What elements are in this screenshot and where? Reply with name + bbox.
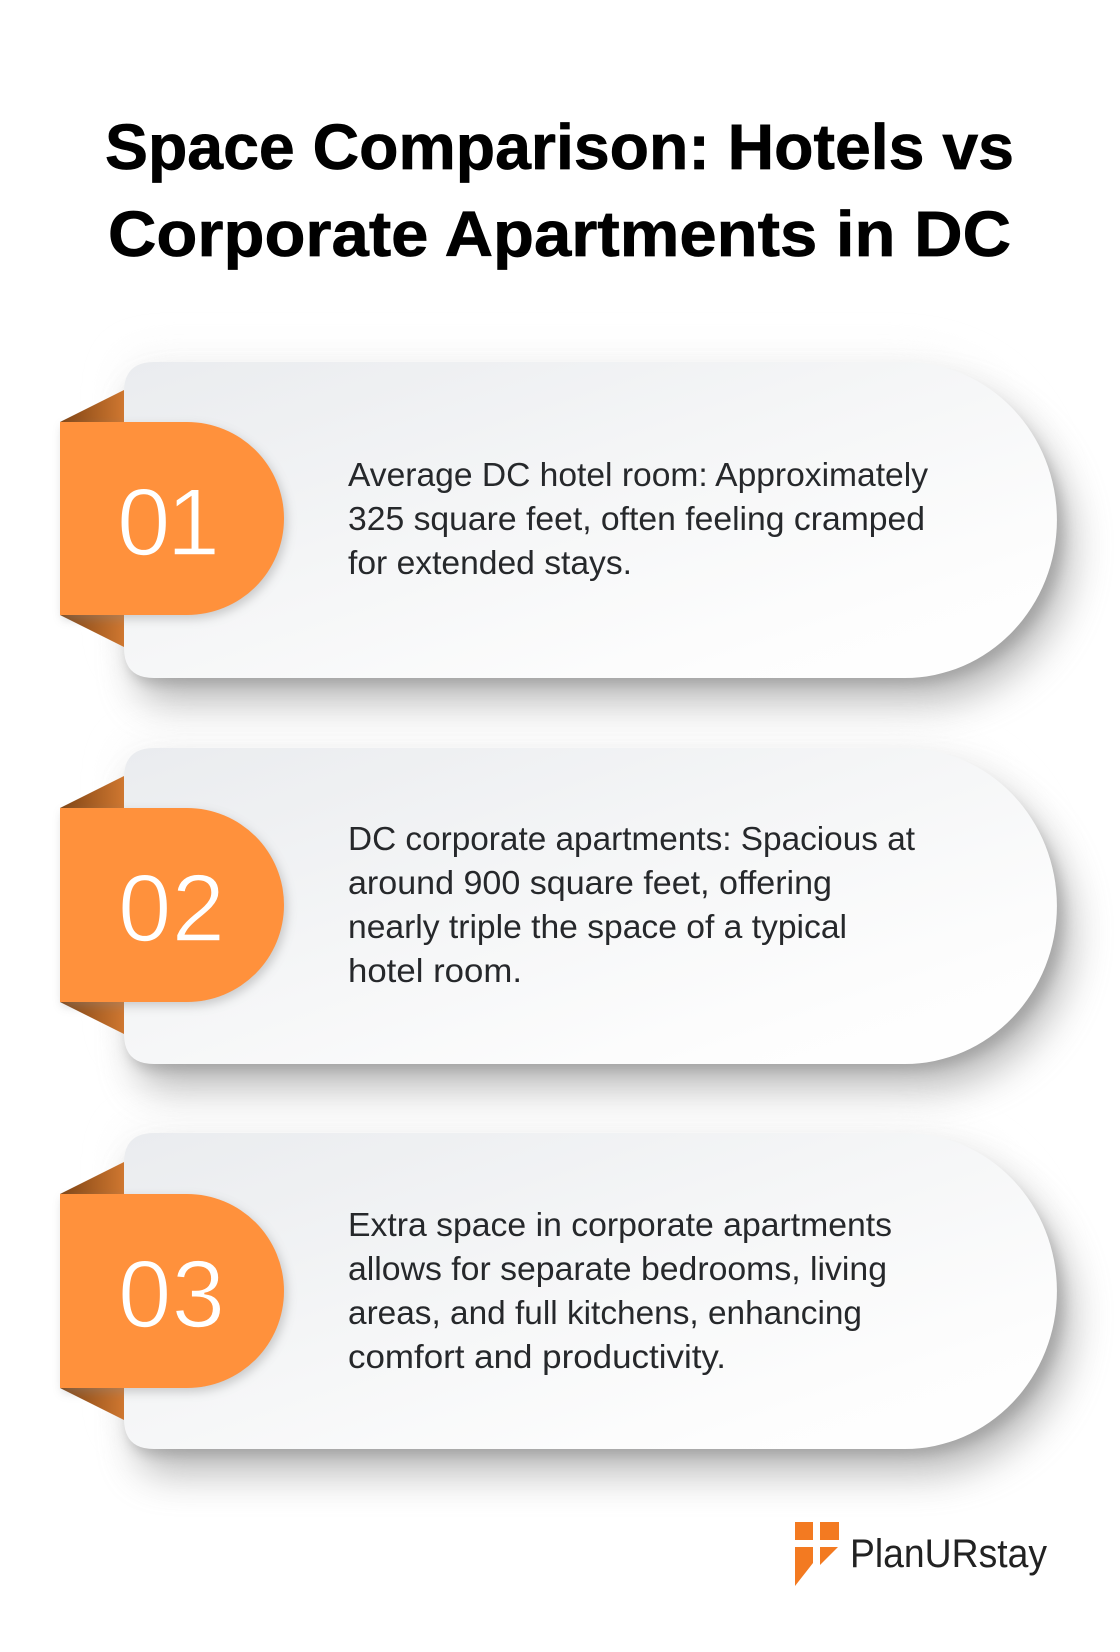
title: Corporate Apartments in DC (108, 198, 1011, 270)
panel: card 2 (60, 742, 1071, 1088)
text block (348, 1206, 892, 1375)
text block: around 900 square feet, offering (348, 864, 832, 901)
title: Space Comparison: Hotels vs (105, 111, 1014, 183)
number badge (60, 808, 287, 1006)
text block: nearly triple the space of a typical (348, 908, 847, 945)
ribbon fold (60, 776, 124, 1034)
number badge (60, 422, 287, 619)
text block: DC corporate apartments: Spacious at (348, 820, 915, 857)
panel: card 3 (60, 1127, 1071, 1473)
ribbon fold (60, 390, 124, 647)
text block (348, 456, 928, 581)
text block: Extra space in corporate apartments (348, 1206, 892, 1243)
icon: logo mark (795, 1522, 839, 1586)
text block: areas, and full kitchens, enhancing (348, 1294, 862, 1331)
text block (348, 820, 915, 989)
logo: PlanURstay (795, 1522, 1047, 1586)
title (105, 111, 1014, 270)
text block: for extended stays. (348, 544, 632, 581)
logo wordmark: PlanURstay (850, 1532, 1047, 1576)
panel: card 1 (60, 356, 1071, 702)
text block: hotel room. (348, 952, 522, 989)
number badge: 03 (118, 1241, 225, 1348)
number badge: 02 (118, 855, 225, 962)
number badge: 01 (117, 469, 220, 576)
number badge (60, 1194, 287, 1392)
text block: allows for separate bedrooms, living (348, 1250, 887, 1287)
text block: Average DC hotel room: Approximately (348, 456, 928, 493)
ribbon fold (60, 1162, 124, 1420)
text block: comfort and productivity. (348, 1338, 726, 1375)
text block: 325 square feet, often feeling cramped (348, 500, 925, 537)
